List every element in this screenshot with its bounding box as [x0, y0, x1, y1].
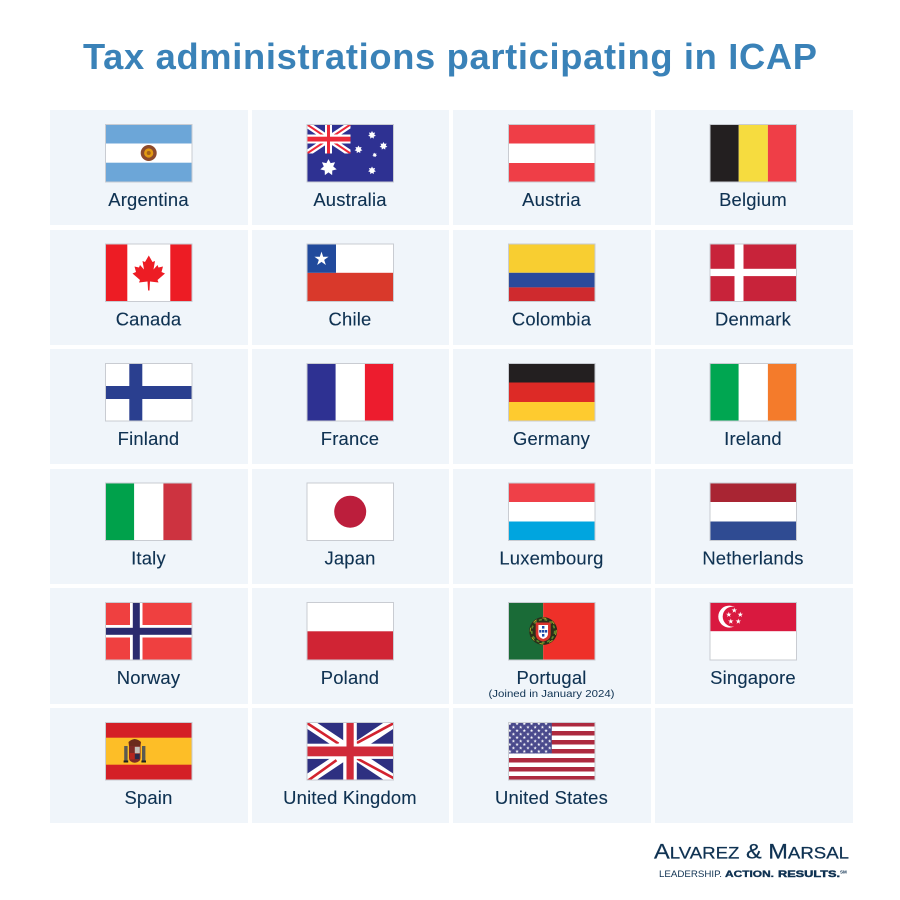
panel: Netherlands	[655, 469, 853, 584]
flag: Italy	[105, 482, 192, 541]
panel: United Kingdom	[252, 708, 449, 823]
flag: United Kingdom	[306, 722, 394, 781]
flag: Germany	[508, 363, 596, 422]
flag: Austria	[508, 124, 596, 182]
panel: Poland	[252, 588, 449, 704]
flag: United States	[508, 722, 596, 780]
logo tagline: results: RESULTS.	[778, 869, 840, 879]
label: Norway: Norway	[117, 667, 181, 688]
label: Italy: Italy	[131, 548, 166, 568]
label: Denmark: Denmark	[715, 308, 792, 330]
label: Canada: Canada	[116, 308, 182, 330]
panel: Germany	[453, 349, 651, 464]
panel: Japan	[252, 469, 449, 584]
flag: Canada	[105, 244, 192, 302]
label: United Kingdom: United Kingdom	[283, 787, 417, 808]
flag: Japan	[306, 482, 394, 541]
panel: Ireland	[655, 349, 853, 464]
flag: Chile	[306, 244, 394, 302]
flag: Spain	[105, 722, 192, 780]
label: Luxembourg: Luxembourg	[499, 548, 604, 568]
label: Colombia: Colombia	[512, 308, 592, 330]
label: Austria: Austria	[522, 189, 581, 210]
label: Argentina: Argentina	[108, 189, 189, 210]
label: Chile: Chile	[329, 308, 371, 330]
note: Portugal joined: (Joined in January 2024)	[488, 689, 614, 700]
flag: Belgium	[710, 124, 797, 182]
panel: Norway	[50, 588, 248, 704]
label: Netherlands: Netherlands	[702, 548, 804, 568]
label: Australia: Australia	[313, 189, 387, 210]
label: Belgium: Belgium	[719, 189, 787, 210]
label: Ireland: Ireland	[724, 428, 782, 449]
flag: Argentina	[105, 124, 192, 182]
label: Germany: Germany	[513, 428, 591, 449]
label: United States: United States	[495, 787, 608, 808]
label: Japan: Japan	[324, 548, 376, 568]
panel: Spain	[50, 708, 248, 823]
panel: Argentina	[50, 110, 248, 225]
label: France: France	[321, 428, 379, 449]
title: Tax administrations participating in ICAP	[83, 36, 817, 77]
label: Singapore: Singapore	[710, 667, 796, 688]
panel: Luxembourg	[453, 469, 651, 584]
logo tagline: leadership: LEADERSHIP.	[659, 869, 722, 879]
panel: Denmark	[655, 230, 853, 345]
flag: Denmark	[710, 244, 797, 302]
panel: United States	[453, 708, 651, 823]
label: Poland: Poland	[321, 667, 379, 688]
panel: Chile	[252, 230, 449, 345]
flag: Australia	[306, 124, 394, 182]
flag: Colombia	[508, 244, 596, 302]
panel: Singapore	[655, 588, 853, 704]
flag: Luxembourg	[508, 482, 596, 541]
panel: Canada	[50, 230, 248, 345]
flag: France	[306, 363, 394, 422]
panel: Australia	[252, 110, 449, 225]
logo wordmark: ALVAREZ & MARSAL	[654, 840, 849, 864]
flag: Singapore	[710, 602, 797, 660]
panel: Colombia	[453, 230, 651, 345]
label: Spain: Spain	[124, 787, 173, 808]
label: Finland: Finland	[118, 428, 179, 449]
flag: Norway	[105, 602, 192, 660]
panel: France	[252, 349, 449, 464]
panel: Portugal	[453, 588, 651, 704]
label: Portugal: Portugal	[516, 667, 587, 688]
flag: Netherlands	[710, 482, 797, 541]
logo tagline: action: ACTION.	[725, 869, 774, 879]
flag: Finland	[105, 363, 192, 422]
flag: Poland	[306, 602, 394, 660]
panel: Italy	[50, 469, 248, 584]
flag: Portugal	[508, 602, 596, 660]
panel: Finland	[50, 349, 248, 464]
logo: Alvarez & Marsal	[654, 840, 849, 879]
panel: empty cell	[655, 708, 853, 823]
panel: Belgium	[655, 110, 853, 225]
panel: Austria	[453, 110, 651, 225]
flag: Ireland	[710, 363, 797, 422]
logo service mark: SM	[840, 870, 847, 874]
